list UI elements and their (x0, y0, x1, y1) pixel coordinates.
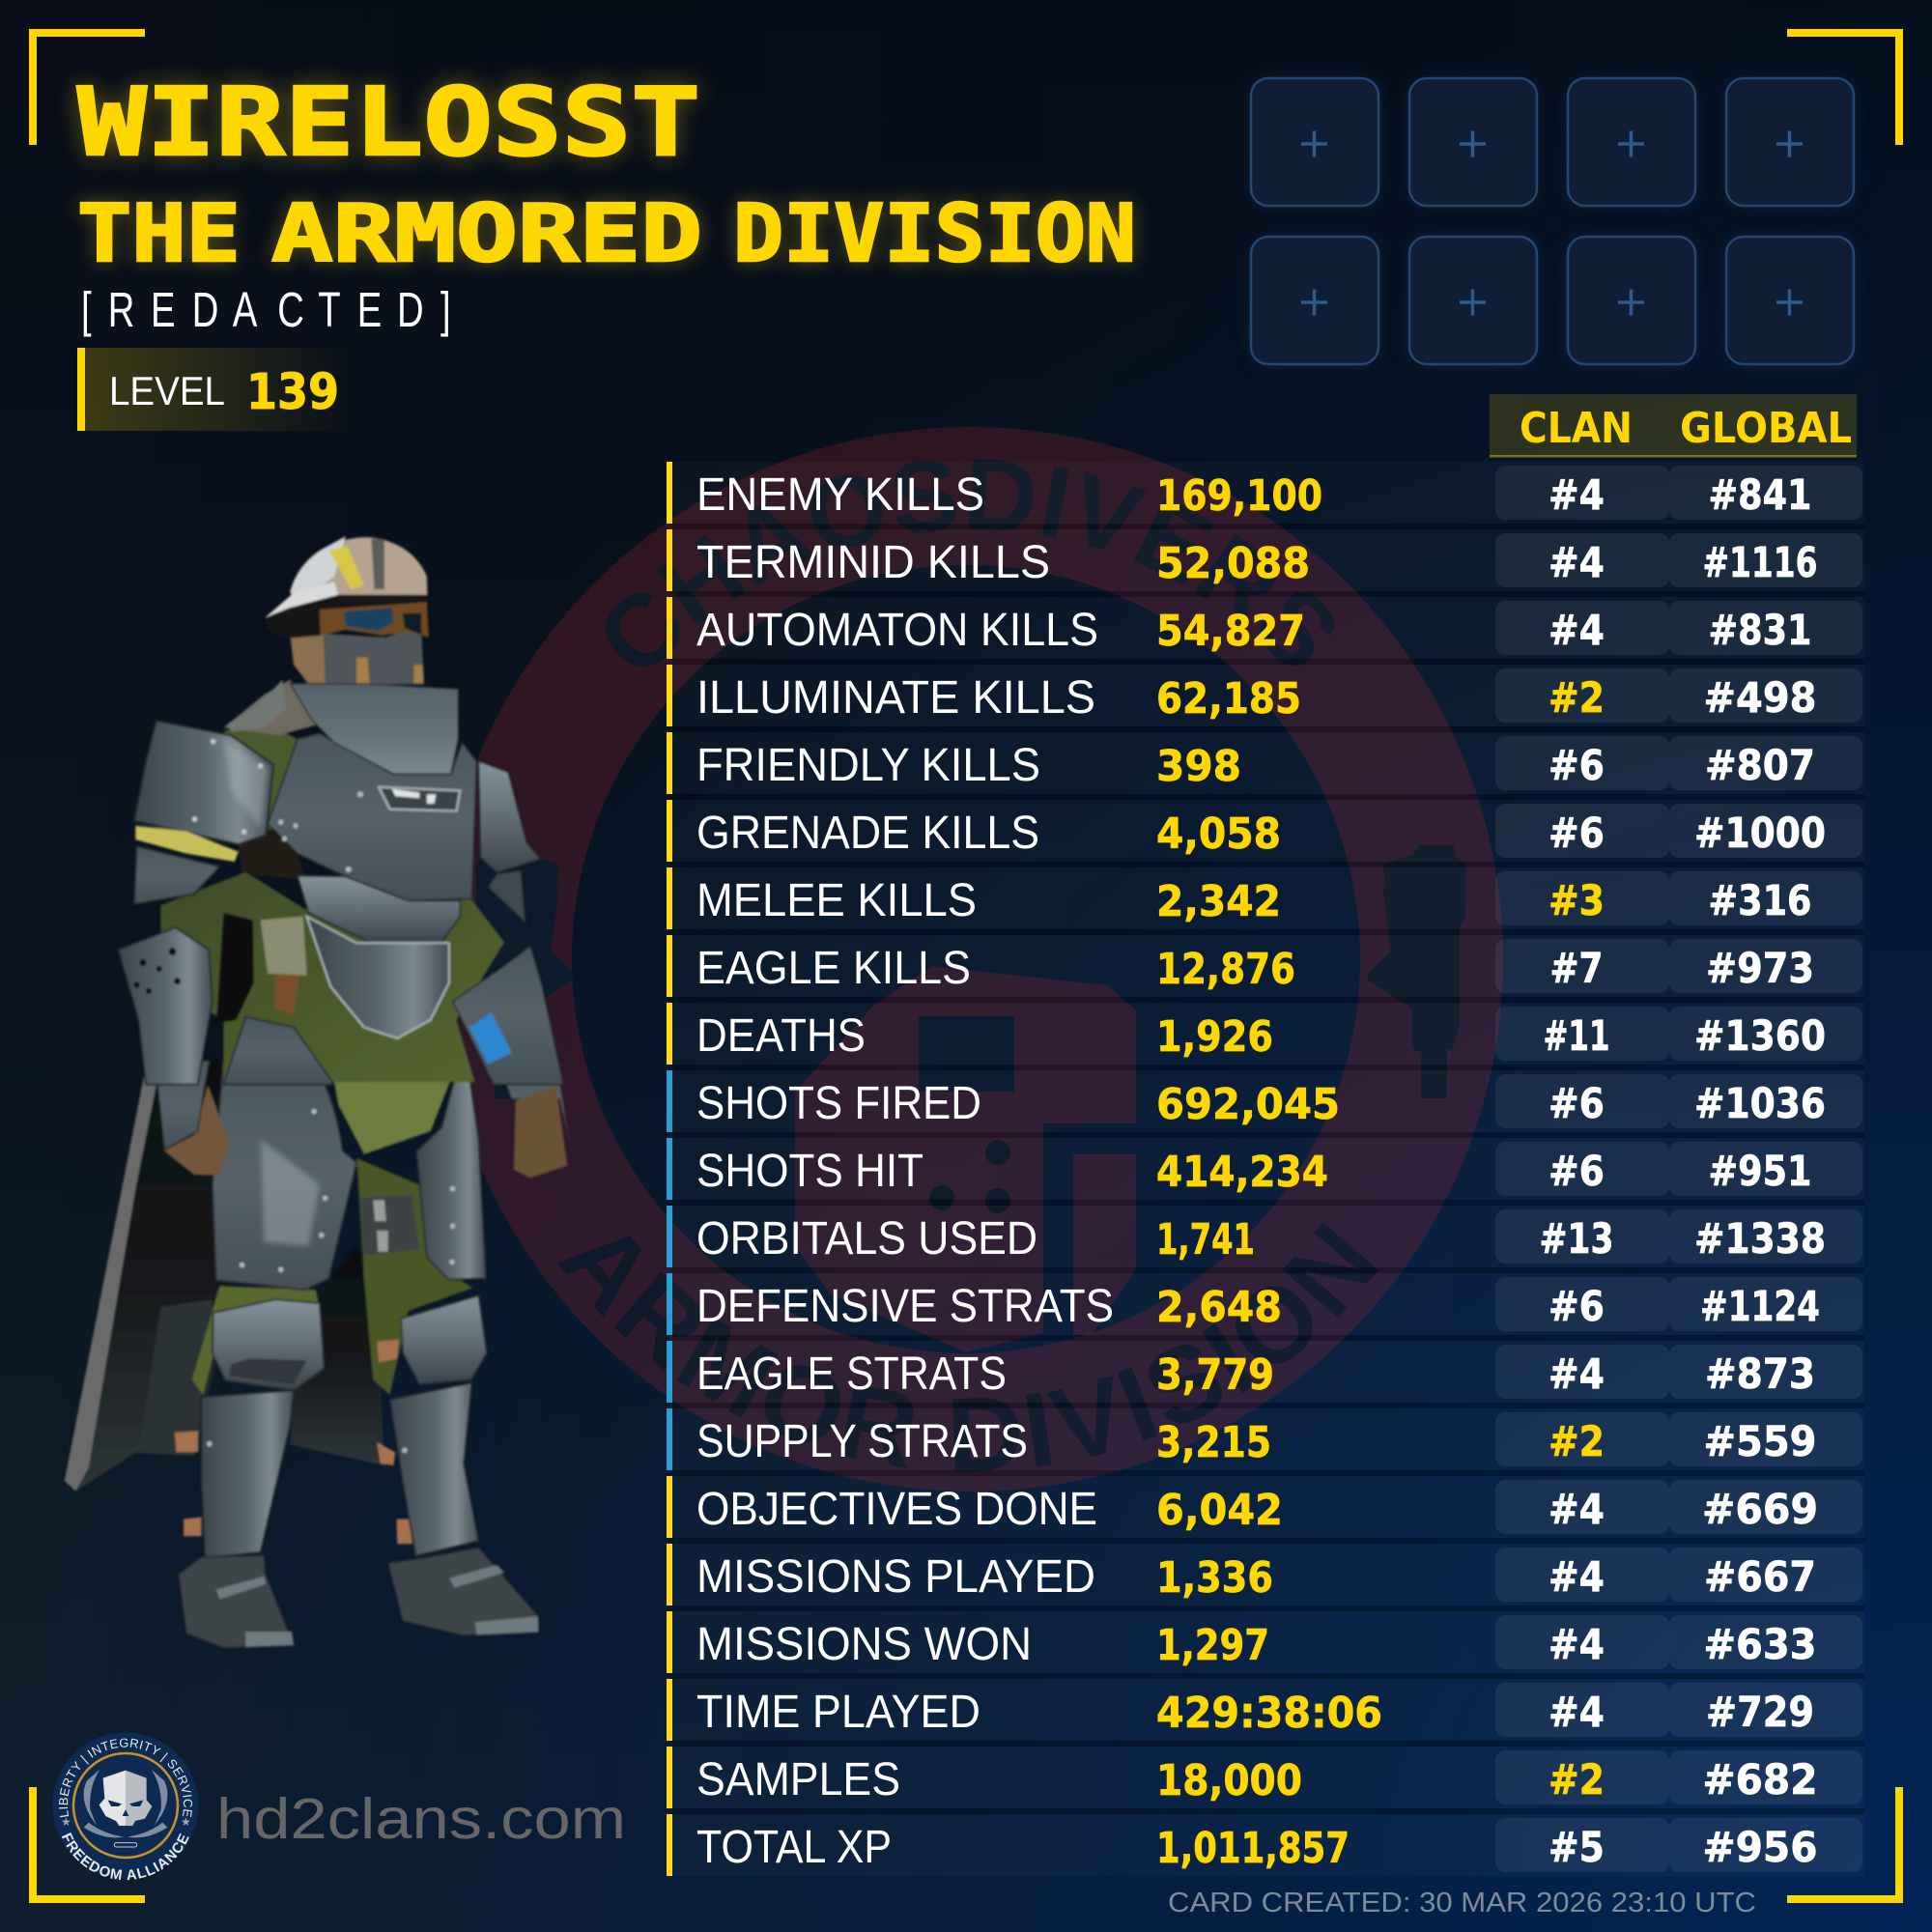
row: shots hit (667, 1138, 1864, 1200)
corner bracket bottom-right (1787, 1787, 1903, 1903)
row: deaths: DEATHS (696, 1010, 866, 1062)
row: shots fired: 692,045 (1156, 1080, 1340, 1129)
heading: clan name: THE (77, 188, 241, 280)
logo bottom text: FREEDOM ALLIANCE (62, 1833, 189, 1880)
logo star right: ★ (181, 1815, 191, 1829)
visor lens (344, 608, 393, 631)
row: samples (667, 1747, 1864, 1808)
logo star left: ★ (61, 1815, 71, 1829)
corner bracket bottom-left (29, 1787, 145, 1903)
clan header: CLAN (1520, 404, 1633, 453)
row gaps (672, 524, 1864, 1814)
row: time played (667, 1679, 1864, 1741)
left pauldron back (227, 680, 286, 731)
row: illuminate kills: #2 (1548, 675, 1605, 723)
row: enemy kills: ENEMY KILLS (696, 469, 984, 521)
left boot (179, 1555, 294, 1648)
row: missions played: 1,336 (1156, 1553, 1273, 1603)
row: samples: 18,000 (1156, 1756, 1302, 1805)
left shin (201, 1390, 294, 1558)
row: friendly kills: #807 (1705, 743, 1815, 790)
row: shots fired: #6 (1548, 1081, 1605, 1128)
row: illuminate kills: #498 (1704, 675, 1816, 723)
row: friendly kills: 398 (1156, 742, 1241, 791)
row: missions won: 1,297 (1156, 1621, 1269, 1670)
row: missions won: #633 (1704, 1622, 1816, 1669)
green body (160, 872, 504, 1082)
left thigh plate (213, 1063, 356, 1290)
row: time played: 429:38:06 (1156, 1689, 1382, 1738)
legs and lower armor (156, 1061, 569, 1648)
row: eagle strats: #4 (1548, 1351, 1605, 1399)
row: friendly kills: #6 (1548, 743, 1605, 790)
row: supply strats (667, 1408, 1864, 1470)
row: shots fired: SHOTS FIRED (696, 1078, 981, 1129)
row: melee kills: #3 (1548, 878, 1605, 925)
stats table (667, 462, 1864, 1876)
row: grenade kills (667, 800, 1864, 862)
row: objectives done: OBJECTIVES DONE (696, 1484, 1097, 1535)
emblem soldier silhouette right (1367, 844, 1465, 1098)
row: samples: SAMPLES (696, 1754, 900, 1805)
row: deaths: 1,926 (1156, 1012, 1273, 1062)
viewer-left pauldron (134, 721, 273, 844)
row: missions won: MISSIONS WON (696, 1619, 1032, 1670)
row: shots hit: SHOTS HIT (696, 1146, 923, 1197)
bracer holes (133, 948, 181, 994)
row: time played: TIME PLAYED (696, 1687, 980, 1738)
row: defensive strats: #6 (1548, 1284, 1605, 1331)
heading: clan name: DIVISION (733, 188, 1136, 280)
global header: GLOBAL (1680, 404, 1852, 453)
right shin (390, 1382, 478, 1556)
blue light (469, 1012, 512, 1065)
row: objectives done: 6,042 (1156, 1486, 1283, 1535)
row: melee kills: #316 (1708, 878, 1812, 925)
row: melee kills: MELEE KILLS (696, 875, 977, 926)
row: terminid kills: 52,088 (1156, 539, 1310, 588)
row: enemy kills: 169,100 (1156, 471, 1322, 521)
row: eagle kills: EAGLE KILLS (696, 943, 971, 994)
row: missions won (667, 1611, 1864, 1673)
row: melee kills: 2,342 (1156, 877, 1281, 926)
row: samples: #2 (1548, 1757, 1605, 1804)
helmet dome (290, 537, 428, 610)
row: friendly kills: FRIENDLY KILLS (696, 740, 1040, 791)
row: melee kills (667, 867, 1864, 929)
row: deaths: #1360 (1694, 1013, 1826, 1061)
goggles (320, 602, 429, 638)
row: missions played: MISSIONS PLAYED (696, 1551, 1095, 1603)
viewer-left bracer (118, 927, 213, 1085)
helmet brim (265, 582, 338, 617)
row: total xp: #5 (1548, 1825, 1605, 1872)
row: grenade kills: 4,058 (1156, 810, 1281, 859)
corner bracket top-left (29, 29, 145, 145)
slot row 1 (1251, 78, 1854, 206)
row: terminid kills: TERMINID KILLS (696, 537, 1050, 588)
row: missions played: #4 (1548, 1554, 1605, 1602)
heading: clan name (77, 188, 1136, 280)
row: eagle strats: 3,779 (1156, 1350, 1274, 1400)
viewer-right pauldron (478, 761, 541, 872)
row: shots fired: #1036 (1694, 1081, 1826, 1128)
row: terminid kills: #4 (1548, 540, 1605, 587)
mask (290, 632, 327, 684)
row: orbitals used (667, 1206, 1864, 1267)
thigh plate tops (223, 1017, 334, 1085)
pauldron yellow strip (135, 826, 239, 862)
row: grenade kills: #1000 (1694, 810, 1826, 858)
belt straps (360, 1194, 419, 1256)
logo skull (84, 1770, 167, 1847)
row: total xp (667, 1814, 1864, 1876)
site name: hd2clans.com (216, 1787, 626, 1851)
emblem center shield (795, 966, 1136, 1352)
row: grenade kills: #6 (1548, 810, 1605, 858)
heading: clan name: ARMORED (271, 188, 702, 280)
row: objectives done: #669 (1702, 1487, 1818, 1534)
corner bracket top-right (1787, 29, 1903, 145)
emblem bottom text: ARMOR DIVISION (556, 1223, 1378, 1472)
row: eagle kills: #973 (1706, 946, 1814, 993)
chest badge (379, 787, 460, 811)
emblem soldier silhouette left (476, 844, 575, 1098)
abdomen plate (298, 876, 460, 943)
row: deaths: #11 (1544, 1013, 1609, 1061)
emblem top text: CHAOSDIVERS (606, 459, 1335, 667)
row: missions played: #667 (1704, 1554, 1816, 1602)
row: automaton kills: #4 (1548, 608, 1605, 655)
row: automaton kills: AUTOMATON KILLS (696, 605, 1098, 656)
helmet stripes (328, 546, 364, 589)
collar (290, 684, 458, 774)
slot row 2 (1251, 237, 1854, 364)
row: automaton kills: 54,827 (1156, 607, 1305, 656)
row: time played: #729 (1706, 1690, 1814, 1737)
row: supply strats: #559 (1704, 1419, 1816, 1466)
green legs (192, 1286, 320, 1395)
logo disc (52, 1733, 199, 1878)
table header (1490, 394, 1857, 458)
row: objectives done (667, 1476, 1864, 1538)
row: grenade kills: GRENADE KILLS (696, 808, 1039, 859)
row: terminid kills: #1116 (1702, 540, 1818, 587)
row: time played: #4 (1548, 1690, 1605, 1737)
row: missions won: #4 (1548, 1622, 1605, 1669)
row: eagle strats: EAGLE STRATS (696, 1349, 1007, 1400)
row: eagle kills (667, 935, 1864, 997)
row: shots hit: 414,234 (1156, 1148, 1328, 1197)
shadow gap (216, 913, 254, 1024)
title: player name: WIRELOSST (77, 68, 700, 177)
pauldron rivets (192, 739, 263, 883)
thigh rivets (207, 1109, 455, 1453)
row: automaton kills: #831 (1708, 608, 1812, 655)
subtitle: redacted tag: [REDACTED] (81, 282, 451, 337)
row: automaton kills (667, 597, 1864, 659)
row: supply strats: 3,215 (1156, 1418, 1271, 1467)
chest plate (268, 733, 476, 901)
neck strap (223, 680, 320, 735)
row: enemy kills: #841 (1708, 472, 1812, 520)
orange straps (175, 1340, 412, 1544)
row: enemy kills (667, 462, 1864, 524)
row: total xp: 1,011,857 (1156, 1824, 1350, 1873)
right boot (388, 1548, 538, 1635)
row: samples: #682 (1702, 1757, 1818, 1804)
row: shots hit: #6 (1548, 1149, 1605, 1196)
right gauntlet and hand (497, 1061, 569, 1141)
chest rivets (278, 791, 363, 872)
lower breastplate (306, 917, 449, 1038)
row: friendly kills (667, 732, 1864, 794)
row: supply strats: #2 (1548, 1419, 1605, 1466)
row: defensive strats: DEFENSIVE STRATS (696, 1281, 1114, 1332)
left hand (164, 1086, 229, 1176)
row: defensive strats: #1124 (1700, 1284, 1820, 1331)
row: illuminate kills (667, 665, 1864, 726)
row: total xp: #956 (1702, 1825, 1818, 1872)
row: orbitals used: 1,741 (1156, 1215, 1255, 1264)
cape (65, 1039, 384, 1492)
freedom alliance logo (52, 1733, 199, 1880)
row: orbitals used: #13 (1540, 1216, 1613, 1264)
achievement slots (1251, 78, 1854, 364)
level badge (77, 348, 357, 431)
row: terminid kills (667, 529, 1864, 591)
right thigh plate (416, 1063, 486, 1280)
emblem ring (439, 427, 1503, 1492)
dark under arm (239, 828, 305, 879)
row: enemy kills: #4 (1548, 472, 1605, 520)
footer: card created timestamp: CARD CREATED: 30 MAR 2026 23:10 UTC (1168, 1888, 1756, 1918)
row: eagle strats (667, 1341, 1864, 1403)
emblem shield dots (929, 1140, 1010, 1213)
left knee (213, 1299, 324, 1390)
row: illuminate kills: 62,185 (1156, 674, 1301, 724)
row: orbitals used: ORBITALS USED (696, 1213, 1037, 1264)
row: eagle kills: #7 (1549, 946, 1604, 993)
row: supply strats: SUPPLY STRATS (696, 1416, 1028, 1467)
level value: 139 (246, 364, 339, 421)
row: deaths (667, 1003, 1864, 1065)
logo top text: LIBERTY | INTEGRITY | SERVICE (59, 1739, 193, 1818)
row: orbitals used: #1338 (1694, 1216, 1826, 1264)
slot plus signs (1301, 131, 1803, 315)
row: eagle kills: 12,876 (1156, 945, 1295, 994)
character: armored helldiver (65, 536, 569, 1648)
row: defensive strats (667, 1273, 1864, 1335)
right knee (401, 1295, 487, 1384)
row: total xp: TOTAL XP (696, 1822, 892, 1873)
torso and arms (118, 536, 563, 1085)
logo gold ring (73, 1753, 178, 1858)
pouch (261, 917, 306, 976)
row: shots fired (667, 1070, 1864, 1132)
row: objectives done: #4 (1548, 1487, 1605, 1534)
row: shots hit: #951 (1708, 1149, 1812, 1196)
row: defensive strats: 2,648 (1156, 1283, 1282, 1332)
row: eagle strats: #873 (1705, 1351, 1815, 1399)
row: missions played (667, 1544, 1864, 1605)
viewer-right bracer (453, 946, 563, 1085)
pauldron lower plate (134, 846, 220, 904)
left wrist guard (156, 1061, 210, 1150)
row: illuminate kills: ILLUMINATE KILLS (696, 672, 1095, 724)
level label: LEVEL (109, 368, 225, 413)
watermark emblem (456, 427, 1503, 1492)
